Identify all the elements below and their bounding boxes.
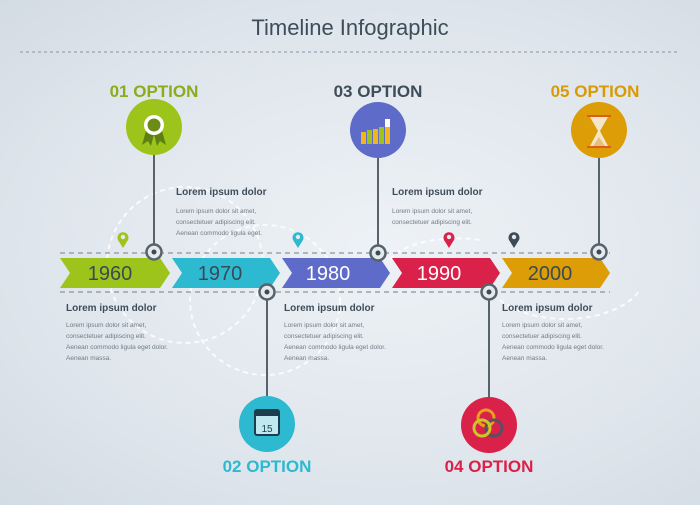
option 03: 03 OPTION <box>334 82 422 101</box>
option 01: 01 OPTION <box>110 82 198 101</box>
text: Lorem ipsum dolor sit amet, <box>502 322 582 329</box>
text: Lorem ipsum dolor sit amet, <box>392 208 472 215</box>
text: consectetuer adipiscing elit. <box>392 219 472 226</box>
timeline arrows: 1970 <box>198 263 242 285</box>
option 04 <box>445 397 533 476</box>
text: consectetuer adipiscing elit. <box>284 333 364 340</box>
option 02 <box>223 396 311 476</box>
text blocks: Lorem ipsum dolor <box>176 187 267 198</box>
text blocks: Lorem ipsum dolor <box>502 303 593 314</box>
text: consectetuer adipiscing elit. <box>176 219 256 226</box>
timeline arrows: 2000 <box>528 263 572 285</box>
text blocks: Lorem ipsum dolor <box>284 303 375 314</box>
text: Aenean massa. <box>66 355 111 362</box>
text blocks <box>66 187 593 314</box>
option 02: 15 <box>261 424 273 435</box>
timeline arrows: 1990 <box>417 263 461 285</box>
text blocks: Lorem ipsum dolor <box>392 187 483 198</box>
text: consectetuer adipiscing elit. <box>66 333 146 340</box>
text blocks: Lorem ipsum dolor <box>66 303 157 314</box>
timeline arrows <box>60 258 610 288</box>
text: consectetuer adipiscing elit. <box>502 333 582 340</box>
option 03 <box>334 82 422 158</box>
connectors <box>154 150 599 400</box>
option 04: 04 OPTION <box>445 457 533 476</box>
text: Aenean commodo ligula eget dolor. <box>66 344 168 351</box>
text: Aenean massa. <box>502 355 547 362</box>
text: Aenean commodo ligula eget. <box>176 230 262 237</box>
pins <box>118 232 520 248</box>
title: Timeline Infographic <box>251 15 449 40</box>
option 05: 05 OPTION <box>551 82 639 101</box>
option 02: 02 OPTION <box>223 457 311 476</box>
timeline arrows: 1980 <box>306 263 350 285</box>
text: Lorem ipsum dolor sit amet, <box>66 322 146 329</box>
text: Aenean commodo ligula eget dolor. <box>502 344 604 351</box>
text: Aenean massa. <box>284 355 329 362</box>
option 01 <box>110 82 198 155</box>
option 05 <box>551 82 639 158</box>
text: Lorem ipsum dolor sit amet, <box>284 322 364 329</box>
text: Aenean commodo ligula eget dolor. <box>284 344 386 351</box>
timeline arrows: 1960 <box>88 263 132 285</box>
text: Lorem ipsum dolor sit amet, <box>176 208 256 215</box>
